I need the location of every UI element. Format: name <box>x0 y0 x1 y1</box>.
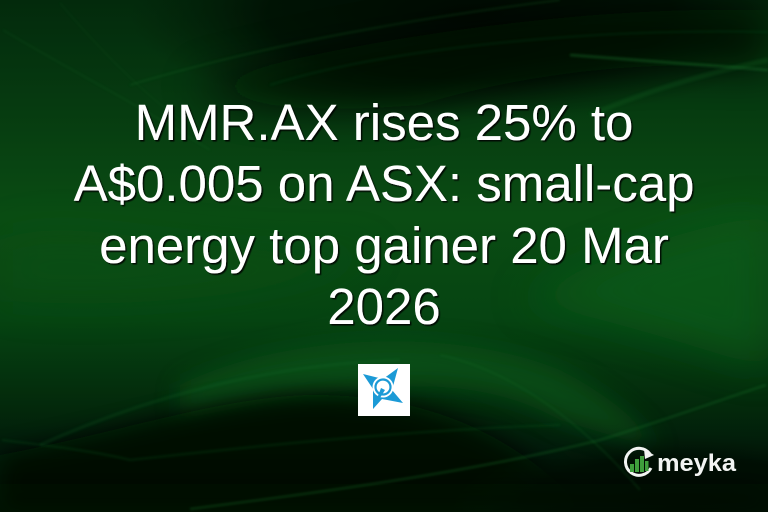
title <box>74 94 694 335</box>
title: energy top gainer 20 Mar <box>99 217 669 274</box>
title: A$0.005 on ASX: small-cap <box>74 155 694 212</box>
icon: company logo <box>358 364 410 416</box>
title: 2026 <box>327 278 441 335</box>
title: MMR.AX rises 25% to <box>135 94 633 151</box>
meyka brand logo <box>625 448 737 477</box>
wordmark: meyka <box>657 450 737 477</box>
icon: meyka ring with bars <box>625 448 654 475</box>
